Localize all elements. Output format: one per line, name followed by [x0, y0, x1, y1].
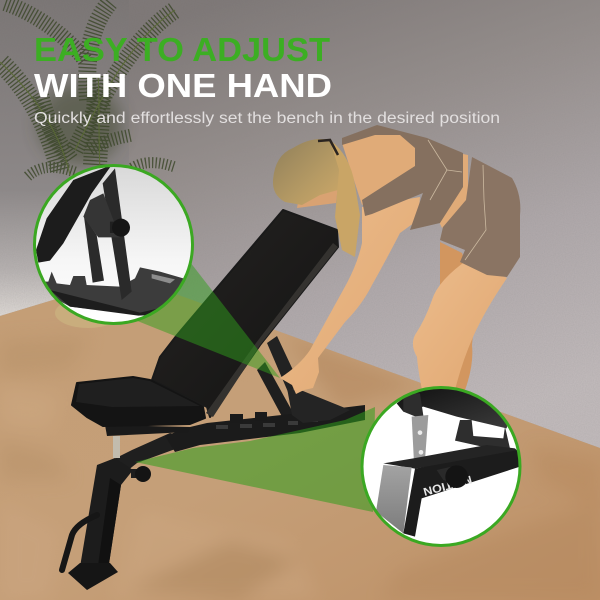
fronds	[0, 2, 175, 177]
round wooden object below detail circle	[55, 298, 121, 328]
main rail	[165, 405, 365, 452]
seat post sleeve	[403, 394, 424, 416]
silver post	[412, 415, 428, 463]
circle two contents	[361, 386, 521, 546]
rail adjustment notches	[230, 412, 267, 423]
seat underside	[397, 388, 510, 428]
leg shaded side	[97, 478, 121, 577]
silver insert	[152, 274, 175, 283]
bracket	[83, 193, 120, 237]
backrest pad	[152, 210, 338, 417]
rail top face	[383, 445, 520, 469]
person: bent over, adjusting bench	[273, 125, 520, 394]
hair	[273, 139, 340, 205]
rear support strut	[257, 362, 296, 424]
adjustment bracket	[287, 388, 350, 423]
rear bracket	[455, 420, 510, 448]
rear leg	[440, 242, 474, 390]
knob stem	[110, 222, 114, 233]
brand mark on rail: MOTION	[422, 473, 473, 497]
face	[297, 186, 338, 208]
base plate	[68, 563, 118, 590]
tank top	[342, 125, 463, 230]
ponytail	[330, 140, 360, 257]
wall texture	[0, 0, 600, 448]
pad	[36, 165, 112, 263]
background: left wall	[0, 0, 129, 316]
title line two: WITH ONE HAND	[34, 67, 332, 104]
detail circle: seat post and knob	[361, 386, 521, 546]
seat top highlight	[76, 378, 200, 407]
knob	[445, 465, 468, 488]
circle one ring	[34, 166, 192, 324]
rail slot highlights	[216, 420, 318, 427]
backrest side frame	[206, 243, 338, 417]
hair tie	[318, 140, 338, 155]
knob stem	[131, 469, 141, 478]
title line one: EASY TO ADJUST	[34, 31, 330, 68]
background: right wall	[129, 0, 600, 448]
plant dense centre	[38, 85, 122, 165]
seat support	[105, 425, 190, 436]
circle one contents	[34, 164, 194, 324]
post hole upper	[418, 430, 422, 435]
green beam: top circle to hand	[130, 262, 280, 378]
silver leg face	[376, 465, 412, 533]
knob stem	[437, 467, 450, 480]
adjustment knob	[135, 466, 151, 482]
seat pad	[72, 377, 205, 426]
front support strut	[267, 336, 300, 392]
handle	[62, 515, 97, 570]
dark rail front	[50, 290, 167, 316]
rail side face	[403, 450, 520, 537]
knob	[112, 219, 130, 237]
bench	[62, 210, 365, 590]
main strut	[103, 168, 132, 300]
frond stems	[0, 10, 175, 175]
shorts	[440, 157, 520, 277]
post hole lower	[419, 450, 423, 455]
lower base rail	[46, 267, 184, 313]
inclined strut	[112, 433, 200, 475]
inner strut	[84, 217, 104, 283]
circle two ring	[362, 388, 520, 546]
shorts seams	[428, 140, 486, 260]
front thigh and leg	[413, 258, 507, 390]
back skin	[342, 130, 468, 228]
silver post	[113, 436, 120, 458]
floor wood streaks	[172, 347, 584, 590]
decorative plant	[0, 2, 175, 177]
green beam: lower circle to bench leg	[135, 407, 375, 512]
leg post	[80, 458, 133, 577]
subtitle: Quickly and effortlessly set the bench in the desired position	[34, 110, 500, 127]
arm and shoulder	[280, 197, 420, 394]
detail circle: backrest strut	[34, 164, 194, 324]
background: wooden floor	[0, 277, 600, 600]
